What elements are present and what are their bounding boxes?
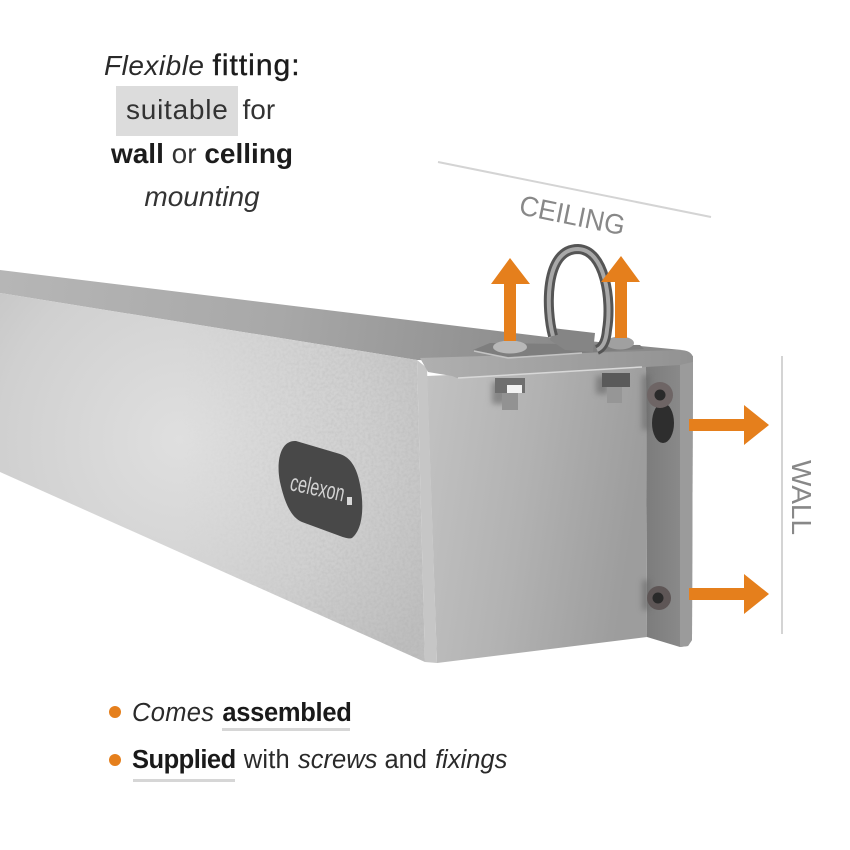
heading line 1: Flexible fitting:: [104, 49, 301, 82]
flange lower highlight: [458, 367, 642, 378]
hinge clip: [550, 328, 595, 352]
logo text: celexon: [288, 469, 347, 507]
left nut and thread: [495, 378, 525, 410]
D-ring hook: [549, 249, 608, 350]
orange arrow: wall top: [689, 405, 769, 445]
product illustration: screen casing with brackets and arrows: [0, 161, 811, 663]
bracket plate on top: [473, 343, 644, 357]
casing side face: [0, 293, 425, 662]
highlight behind suitable: [116, 86, 238, 136]
bullet text 1: Comes assembled: [132, 699, 352, 727]
heading line 3: wall or celling: [111, 138, 293, 169]
heading line 2: suitable for: [126, 94, 275, 125]
heading line 4: mounting: [144, 181, 260, 212]
right bolt head: [606, 336, 634, 350]
heading block: [104, 49, 301, 212]
WALL label: WALL: [786, 460, 817, 535]
front corner edge: [417, 360, 437, 663]
wall bracket: [646, 350, 693, 647]
orange arrow: wall bottom: [689, 574, 769, 614]
bullet dot 2: [109, 754, 121, 766]
top screw and keyhole slot: [647, 382, 674, 443]
right nut and thread: [602, 373, 630, 403]
side face texture: [292, 346, 418, 612]
left bolt head: [493, 340, 527, 354]
end panel: [427, 366, 647, 663]
orange arrow: ceiling left: [491, 258, 530, 341]
bullet text 2: Supplied with screws and fixings: [132, 746, 507, 774]
casing top face: [0, 270, 682, 362]
ceiling flange: [420, 350, 693, 378]
logo square: [347, 497, 352, 505]
CEILING label: CEILING: [517, 190, 628, 241]
nut shadows: [492, 375, 650, 610]
bottom screw: [647, 586, 671, 610]
underline 2: [133, 779, 235, 782]
orange arrow: ceiling right: [601, 256, 640, 338]
logo badge: [279, 441, 362, 538]
wall guide line: [781, 356, 783, 634]
ceiling guide line: [438, 162, 711, 217]
bullet dot 1: [109, 706, 121, 718]
underline 1: [222, 728, 350, 731]
bracket outer strip: [680, 356, 693, 647]
bullet list: [109, 699, 507, 782]
plate edge: [474, 351, 582, 358]
